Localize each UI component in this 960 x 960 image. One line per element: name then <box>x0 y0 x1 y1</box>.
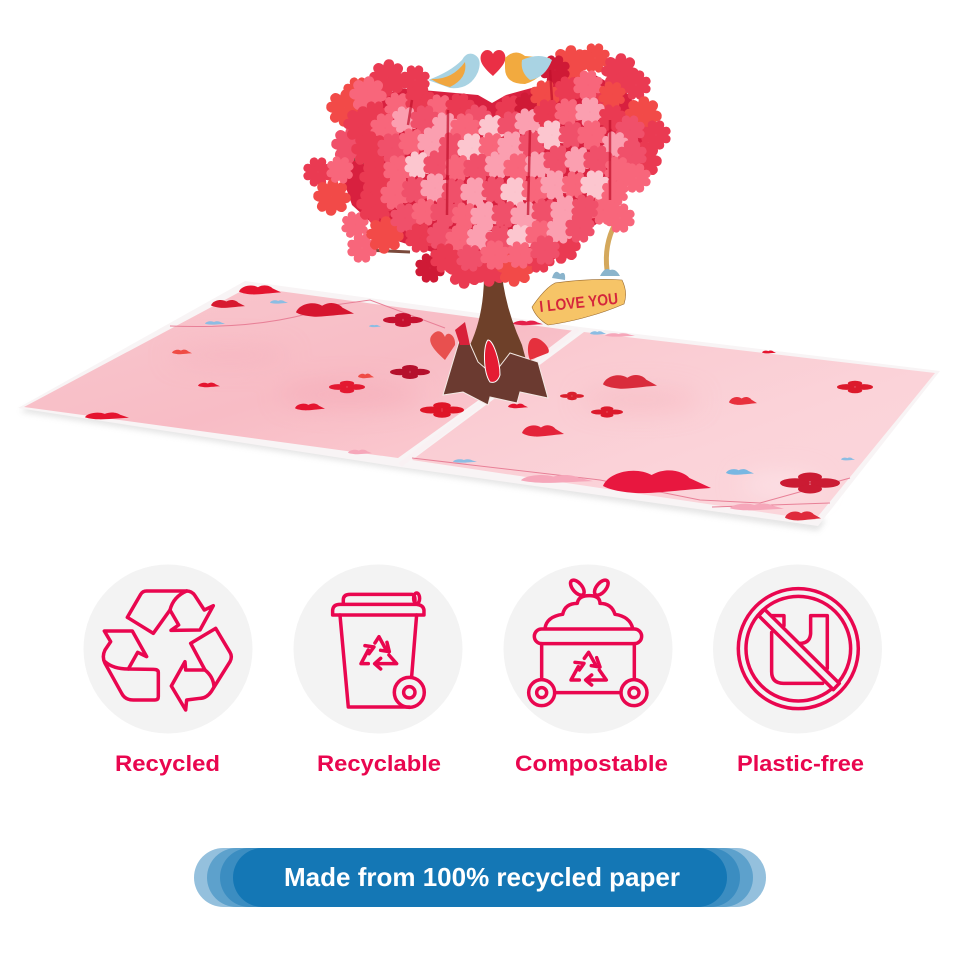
sign birds <box>552 269 620 280</box>
outer pill layer <box>194 848 766 907</box>
banner text: Made from 100% recycled paper <box>284 862 680 892</box>
third pill layer <box>220 848 740 907</box>
card white base <box>18 281 940 526</box>
second pill layer <box>207 848 753 907</box>
inner leaves row 4 <box>357 157 399 199</box>
recyclable item <box>294 564 462 776</box>
recycled paper banner <box>194 848 766 907</box>
compostable item <box>504 564 672 776</box>
left paper panel <box>24 287 575 458</box>
hanging I LOVE YOU sign <box>532 269 626 325</box>
trunk <box>465 275 530 375</box>
canopy silhouette <box>338 72 648 278</box>
paper blue and pink marks <box>205 300 855 510</box>
inner leaves row 5 <box>380 180 410 210</box>
inner leaves row 3 <box>349 129 391 171</box>
sign board <box>532 279 626 325</box>
fold shadows in canopy <box>408 70 610 215</box>
label: Recyclable <box>317 751 441 776</box>
icon discs and icons <box>84 564 882 776</box>
paper mottling <box>170 345 820 497</box>
rope of sign <box>606 224 615 270</box>
fold line <box>400 329 578 465</box>
inner leaves row 1 <box>360 101 390 131</box>
disc <box>504 564 672 734</box>
birds and top heart <box>428 50 552 88</box>
base mounds <box>443 328 548 405</box>
heart-shaped tree canopy <box>303 43 671 291</box>
right bird <box>505 52 550 84</box>
base of tree <box>430 322 549 405</box>
icon: compost cart <box>529 578 647 706</box>
paper string lines <box>170 300 850 507</box>
inner leaves row 7 <box>405 223 435 253</box>
inner leaves row 2 <box>341 104 383 146</box>
main pill <box>233 848 727 907</box>
label: Plastic-free <box>737 751 864 776</box>
left bird <box>428 54 480 88</box>
top heart <box>481 50 505 76</box>
inner leaves row 8 <box>430 243 460 273</box>
pop-up card photo <box>18 281 940 531</box>
right paper panel <box>412 332 935 520</box>
label: Recycled <box>115 751 220 776</box>
paper hearts <box>85 285 821 520</box>
recycled item <box>84 564 252 776</box>
icon: no plastic bag <box>738 589 858 709</box>
paper flowers <box>329 313 873 494</box>
inner leaves row 6 <box>390 203 420 233</box>
icon: recycle symbol <box>103 591 231 710</box>
small hearts on base <box>484 340 500 382</box>
sign text: I LOVE YOU <box>539 291 619 316</box>
disc <box>294 564 462 734</box>
disc <box>713 564 882 734</box>
icon: wheelie bin <box>333 593 424 707</box>
card shadow <box>20 405 826 531</box>
plastic-free item <box>713 564 882 776</box>
label: Compostable <box>515 751 668 776</box>
branches <box>343 75 625 252</box>
disc <box>84 564 252 734</box>
outer leaves <box>324 87 366 129</box>
